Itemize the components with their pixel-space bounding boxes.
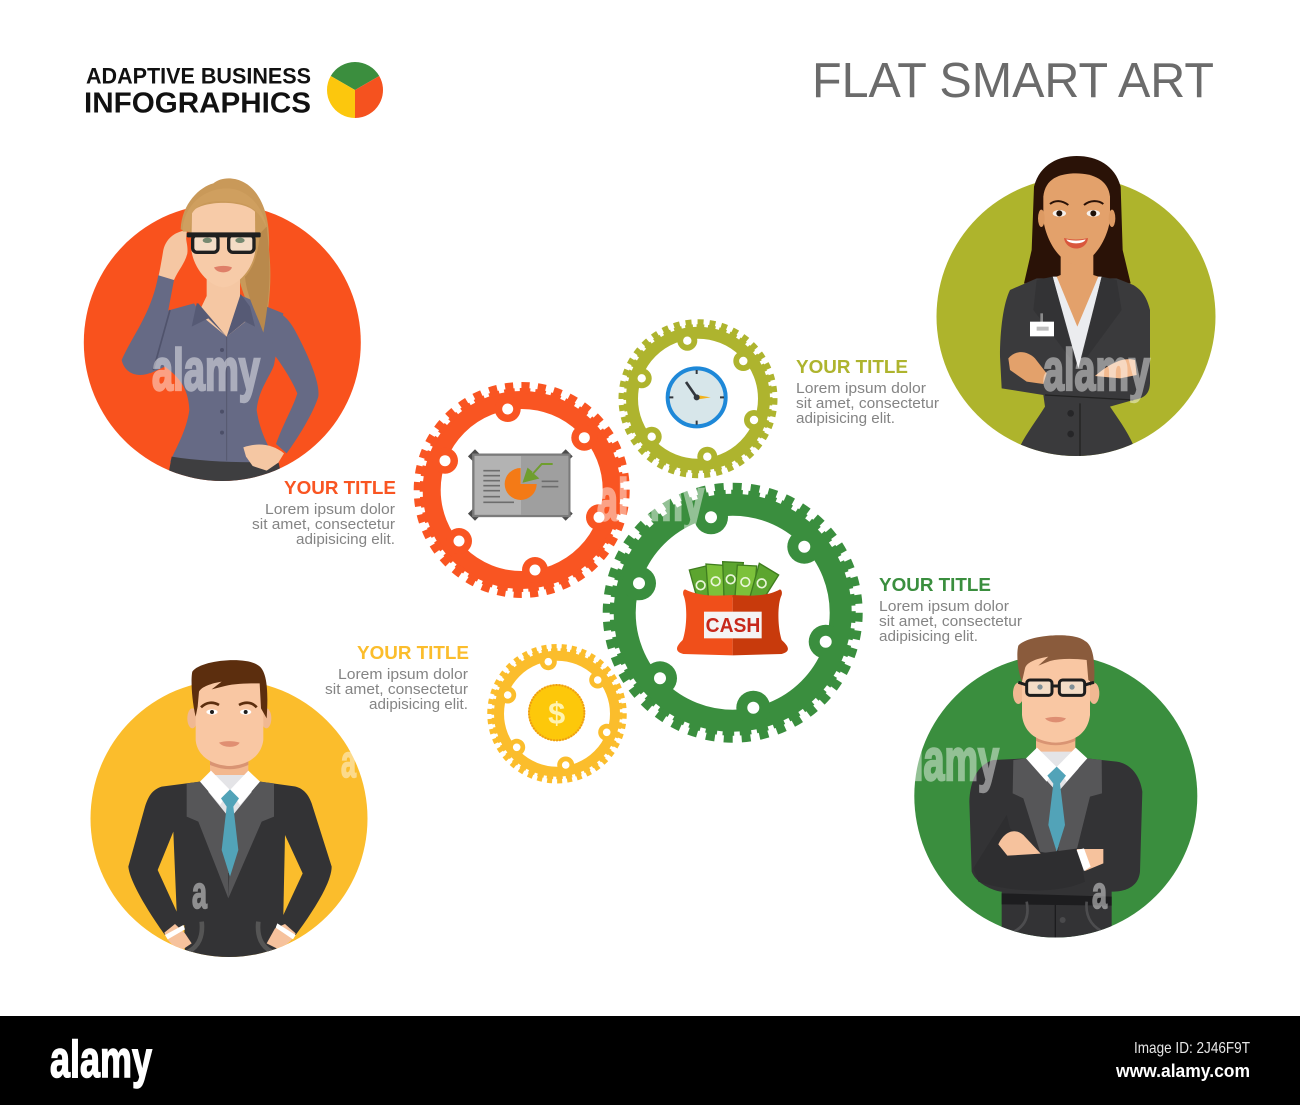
footer image id: Image ID: 2J46F9T — [1134, 1040, 1250, 1057]
watermarks: alamy — [597, 468, 704, 533]
text block: olive title: Lorem ipsum dolor — [796, 381, 926, 397]
watermarks: a — [192, 867, 208, 918]
text block: olive title: adipisicing elit. — [796, 411, 895, 427]
footer bar — [0, 1016, 1300, 1105]
watermarks: a — [341, 736, 357, 787]
watermarks: alamy — [892, 728, 999, 793]
logo text: ADAPTIVE BUSINESS — [86, 64, 311, 88]
yellow gear — [490, 647, 624, 781]
text block: orange title: Lorem ipsum dolor — [265, 502, 395, 518]
text block: green title: YOUR TITLE — [879, 574, 991, 595]
text block: green title — [879, 574, 1022, 645]
panel: man on yellow circle — [90, 660, 368, 960]
text block: olive title — [796, 356, 939, 427]
text block: green title: adipisicing elit. — [879, 629, 978, 645]
icon: cash bag — [677, 562, 788, 655]
text block: olive title: YOUR TITLE — [796, 356, 908, 377]
text block: orange title: adipisicing elit. — [296, 532, 395, 548]
logo text: INFOGRAPHICS — [84, 88, 311, 120]
olive gear — [622, 322, 774, 475]
text block: yellow title — [325, 642, 469, 713]
icon: cash bag: CASH — [706, 615, 760, 637]
orange gear — [417, 386, 626, 594]
text block: yellow title: adipisicing elit. — [369, 697, 468, 713]
logo block — [84, 62, 383, 120]
logo text — [84, 64, 311, 120]
text block: orange title: sit amet, consectetur — [252, 517, 395, 533]
text block: orange title — [252, 477, 396, 548]
icon: dollar coin: $ — [548, 696, 565, 730]
panel: man with glasses on green circle — [914, 635, 1197, 940]
logo pie icon — [327, 62, 383, 118]
footer logo: alamy — [50, 1031, 152, 1089]
watermarks: alamy — [1043, 338, 1150, 403]
text block: yellow title: Lorem ipsum dolor — [338, 667, 468, 683]
watermarks: a — [1092, 867, 1108, 918]
panel: woman with long dark hair on olive circle — [936, 156, 1216, 460]
text block: olive title: sit amet, consectetur — [796, 396, 939, 412]
icon: dollar coin — [528, 684, 585, 741]
text block: orange title: YOUR TITLE — [284, 477, 396, 498]
watermarks — [152, 338, 1150, 918]
footer url: www.alamy.com — [1115, 1061, 1250, 1081]
green gear — [607, 487, 858, 738]
watermarks: alamy — [152, 338, 260, 403]
text block: yellow title: sit amet, consectetur — [325, 682, 468, 698]
text block: green title: Lorem ipsum dolor — [879, 599, 1009, 615]
panel: woman with glasses on orange circle — [84, 178, 361, 483]
text block: yellow title: YOUR TITLE — [357, 642, 469, 663]
main title: FLAT SMART ART — [812, 54, 1214, 108]
text block: green title: sit amet, consectetur — [879, 614, 1022, 630]
icon: clock — [668, 368, 726, 426]
icon: presentation board with pie chart — [468, 449, 573, 521]
